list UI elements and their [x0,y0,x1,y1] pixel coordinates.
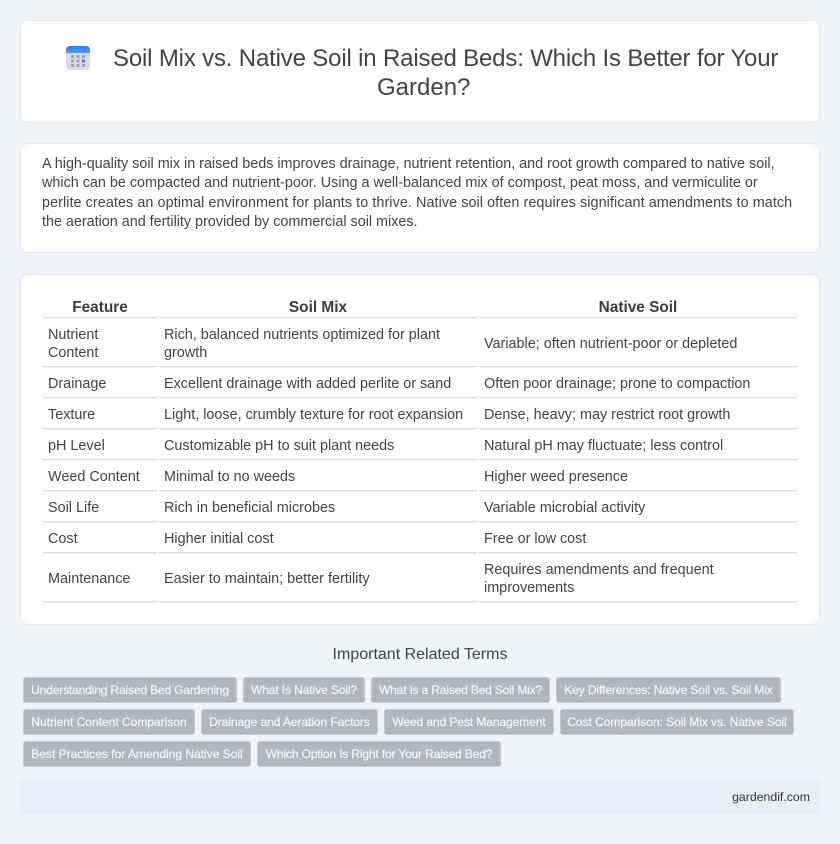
row: Maintenance: improvements [484,580,574,596]
row: Nutrient Content: growth [164,345,207,361]
row: Weed Content [48,469,628,485]
comparison table panel [20,274,820,625]
chip: Weed and Pest Management [392,715,546,729]
description text [42,156,792,230]
chip: Cost Comparison: Soil Mix vs. Native Soil [567,715,787,729]
row: Cost: Free or low cost [484,531,586,547]
row: Texture: Dense, heavy; may restrict root growth [484,407,730,423]
row: Soil Life: Soil Life [48,500,99,516]
row: Weed Content: Minimal to no weeds [164,469,295,485]
table header: Native Soil: Native Soil [599,299,677,316]
row: Drainage: Often poor drainage; prone to compaction [484,376,750,392]
description panel [20,143,820,253]
row: Soil Life [48,500,646,516]
header panel [20,20,820,123]
footer bar [20,780,820,814]
chip: What Is a Raised Bed Soil Mix? [379,683,542,697]
row: Nutrient Content [48,327,737,361]
table header: Feature: Feature [72,299,128,316]
title: Garden? [377,74,470,101]
row: Weed Content: Weed Content [48,469,140,485]
related terms chips [23,677,794,767]
row: Texture [48,407,730,423]
row: pH Level: pH Level [48,438,105,454]
title: Soil Mix vs. Native Soil in Raised Beds: Which Is Better for Your [113,45,778,72]
row: pH Level: Natural pH may fluctuate; less control [484,438,723,454]
chip [23,709,195,735]
row: Maintenance: Maintenance [48,571,130,587]
row: Cost: Higher initial cost [164,531,274,547]
related terms heading: Important Related Terms [333,646,507,663]
table header: Soil Mix: Soil Mix [289,299,347,316]
row: Drainage: Drainage [48,376,106,392]
chip [23,741,251,767]
chip [257,741,501,767]
chip: Drainage and Aeration Factors [209,715,370,729]
title [113,45,778,101]
description text: which can be compacted and nutrient-poor. Using a well-balanced mix of compost, peat moss, and vermiculite or [42,175,758,191]
chip: Key Differences: Native Soil vs. Soil Mix [564,683,773,697]
chip: Which Option Is Right for Your Raised Bed? [266,747,492,761]
icon: calendar [66,46,90,70]
row: pH Level: Customizable pH to suit plant needs [164,438,394,454]
row: Nutrient Content: Rich, balanced nutrients optimized for plant [164,327,440,343]
description text: perlite creates an optimal environment for plants to thrive. Native soil often requires significant amendments to match [42,195,792,211]
row: Nutrient Content: Variable; often nutrient-poor or depleted [484,336,737,352]
chip: Nutrient Content Comparison [31,715,187,729]
row: Cost [48,531,586,547]
row: Texture: Texture [48,407,95,423]
row: Maintenance: Requires amendments and frequent [484,562,714,578]
description text: A high-quality soil mix in raised beds improves drainage, nutrient retention, and root growth compared to native soil, [42,156,775,172]
description text: the aeration and fertility provided by commercial soil mixes. [42,214,418,230]
row: Drainage: Excellent drainage with added perlite or sand [164,376,451,392]
row: Maintenance [48,562,714,596]
chip [556,677,781,703]
chip: Best Practices for Amending Native Soil [31,747,243,761]
row: Texture: Light, loose, crumbly texture for root expansion [164,407,463,423]
row: Weed Content: Higher weed presence [484,469,628,485]
row: Nutrient Content: Nutrient [48,327,98,343]
chip [371,677,550,703]
row: Soil Life: Rich in beneficial microbes [164,500,335,516]
row: Nutrient Content: Content [48,345,98,361]
chip [243,677,365,703]
chip [201,709,378,735]
chip [560,709,794,735]
row: Soil Life: Variable microbial activity [484,500,645,516]
row: pH Level [48,438,723,454]
chip [23,677,237,703]
chip [384,709,554,735]
row: Drainage [48,376,750,392]
row: Cost: Cost [48,531,78,547]
chip: Understanding Raised Bed Gardening [31,683,229,697]
chip: What Is Native Soil? [251,683,357,697]
footer source text: gardendif.com [732,790,810,804]
row: Maintenance: Easier to maintain; better fertility [164,571,370,587]
